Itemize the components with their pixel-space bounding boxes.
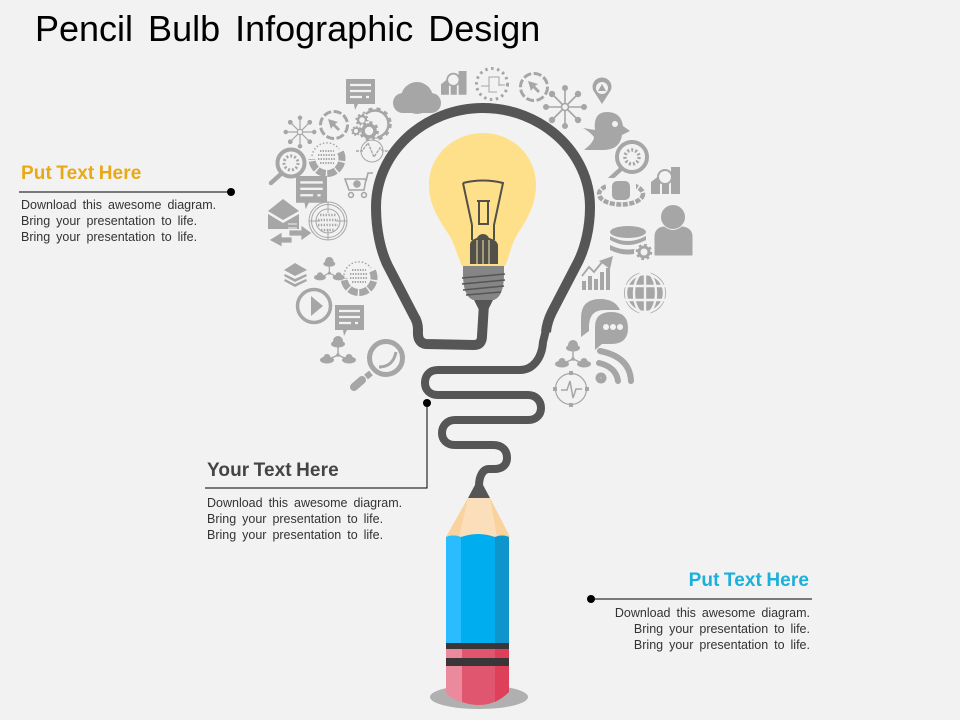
callout text: Bring your presentation to life. bbox=[634, 638, 810, 652]
bulb filament bbox=[463, 180, 503, 264]
callout text bbox=[21, 198, 216, 244]
icon: globe bbox=[624, 272, 666, 314]
icon: chart with magnifier bbox=[441, 71, 467, 95]
icon: speech note bbox=[335, 305, 364, 336]
icon: cloud network bbox=[314, 257, 345, 280]
icon: cloud network bbox=[320, 336, 356, 364]
callout text: Download this awesome diagram. bbox=[21, 198, 216, 212]
callout text: Bring your presentation to life. bbox=[21, 230, 197, 244]
pencil shadow bbox=[430, 685, 528, 709]
icon: magnifier with dots bbox=[610, 142, 647, 179]
icon: magnifier with dots bbox=[271, 150, 304, 183]
icon: layers bbox=[284, 263, 307, 287]
callout text: Bring your presentation to life. bbox=[634, 622, 810, 636]
icon: wave dial bbox=[356, 140, 390, 162]
icon: RSS bbox=[598, 351, 631, 381]
icon: large magnifier bbox=[354, 342, 402, 387]
icon: database ring bbox=[599, 178, 643, 204]
callout heading: Your Text Here bbox=[207, 460, 339, 481]
icon cluster: left of bulb bbox=[268, 79, 402, 387]
icon: network star bbox=[284, 116, 316, 148]
callout text: Download this awesome diagram. bbox=[615, 606, 810, 620]
icon: gears bbox=[352, 109, 390, 141]
icon: location pin bbox=[592, 77, 612, 104]
pencil ferrule bands bbox=[446, 643, 509, 666]
icon: shopping cart bbox=[345, 173, 373, 197]
bulb screw base bbox=[462, 266, 505, 310]
wire: bulb outline bbox=[376, 108, 590, 345]
callout: middle bbox=[205, 399, 431, 542]
icon: data ring bbox=[344, 262, 374, 293]
pencil body bbox=[446, 534, 509, 643]
callout text: Bring your presentation to life. bbox=[207, 528, 383, 542]
callout text: Download this awesome diagram. bbox=[207, 496, 402, 510]
icon: speech bubbles bbox=[581, 299, 628, 350]
pencil tip: graphite bbox=[468, 483, 490, 498]
callout leader line bbox=[19, 188, 235, 196]
wire: squiggle into pencil bbox=[425, 330, 546, 486]
icon: play button bbox=[298, 290, 330, 322]
title: Pencil Bulb Infographic Design bbox=[35, 8, 540, 49]
icon: dotted circuit bbox=[476, 68, 508, 100]
icon: chart with magnifier bbox=[651, 167, 680, 194]
pencil wood bbox=[446, 498, 510, 537]
icon: cloud bbox=[393, 82, 441, 114]
icon: envelope bbox=[268, 199, 299, 229]
callout leader line bbox=[587, 595, 812, 603]
icon: data ring bbox=[312, 143, 342, 174]
icon: cloud network bbox=[555, 340, 591, 368]
pencil bbox=[430, 483, 528, 709]
pencil eraser bbox=[446, 666, 509, 705]
callout heading: Put Text Here bbox=[689, 570, 809, 591]
icon: cursor circle bbox=[520, 74, 548, 100]
icon: growth chart bbox=[582, 256, 613, 290]
icon: pulse circle bbox=[553, 371, 589, 407]
callout text bbox=[207, 496, 402, 542]
icon: target bbox=[309, 202, 347, 240]
callout: left bbox=[19, 163, 235, 244]
bulb glass bbox=[429, 133, 536, 266]
icon cluster: around top and right of bulb bbox=[393, 68, 692, 407]
callout heading: Put Text Here bbox=[21, 163, 141, 184]
icon: user bbox=[655, 205, 692, 255]
icon: cursor circle bbox=[320, 112, 348, 138]
icon: speech note bbox=[346, 79, 375, 110]
icon: network star bbox=[544, 86, 586, 128]
icon: database with gear bbox=[610, 226, 654, 262]
callout: right bbox=[587, 570, 812, 652]
icon: arrows bbox=[269, 225, 312, 247]
icon: bird bbox=[583, 112, 630, 150]
callout text bbox=[615, 606, 810, 652]
callout text: Bring your presentation to life. bbox=[21, 214, 197, 228]
callout leader line bbox=[205, 399, 431, 488]
icon: speech note bbox=[296, 176, 327, 209]
callout text: Bring your presentation to life. bbox=[207, 512, 383, 526]
